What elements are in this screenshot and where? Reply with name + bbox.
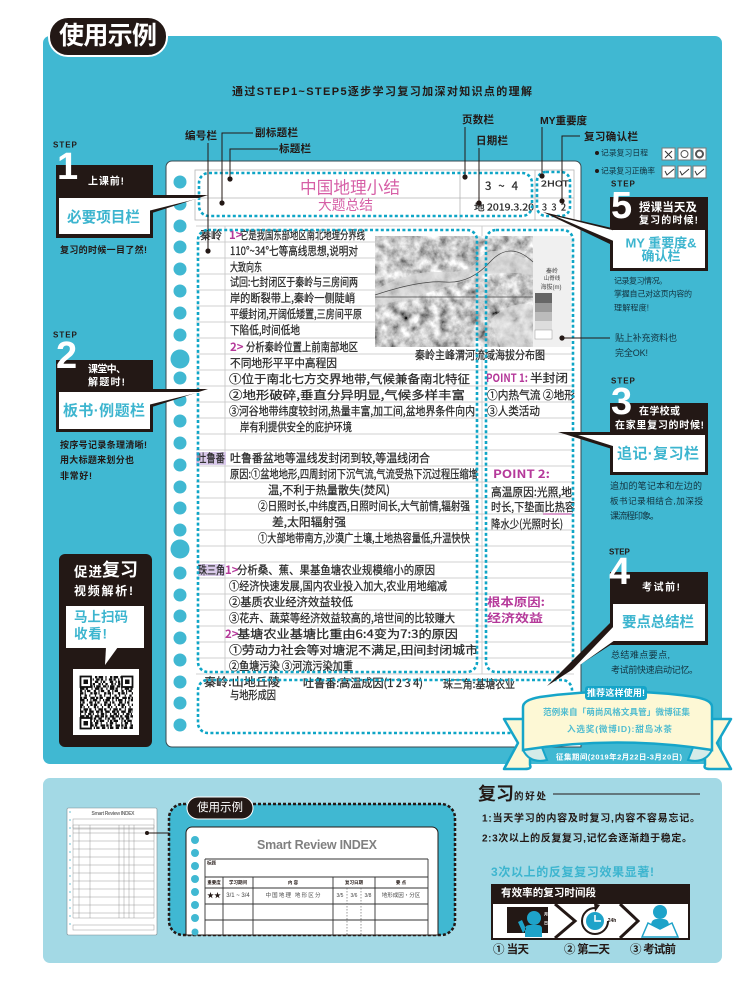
handwritten header [300, 174, 569, 215]
benefits heading: 的好处 [514, 790, 546, 802]
callout: step 5: 复习的时候! [639, 214, 698, 226]
field labels with leader lines: 复习确认栏 [584, 130, 638, 143]
dashed zone: board notes [198, 230, 477, 672]
handwritten notes: main column: ③河谷地带纬度较封闭,热量丰富,加工间,盆地界条件向内 [229, 403, 475, 419]
handwritten notes: main column: ②日照时长,中纬度西,日照时间长,大气前情,辐射强 [258, 498, 470, 514]
pasted map photo: 山脊线 [544, 274, 561, 282]
small title pill [187, 797, 253, 819]
legend: check boxes: 记录复习正确率 [601, 166, 655, 176]
index table: 3/5 [337, 893, 344, 899]
pasted map photo: 秦岭 [546, 267, 558, 275]
speech bubble: 马上扫码 [74, 610, 128, 624]
callout: step 2: 解题时! [88, 376, 125, 388]
handwritten notes: review column: POINT 1: [486, 370, 528, 386]
handwritten notes: main column: ①劳动力社会等对塘泥不满足,田间封闭城市 [229, 642, 478, 658]
callout: step 1 [53, 140, 208, 255]
handwritten notes: review column: POINT 2: [493, 466, 550, 482]
handwritten notes: main column: 分析秦岭位置上前南部地区 [246, 339, 358, 355]
handwritten notes: main column: ②地形破碎,垂直分异明显,气候多样丰富 [229, 387, 465, 403]
field labels with leader lines: 副标题栏 [255, 126, 298, 139]
small index sheet [67, 808, 157, 935]
callout: step 4: STEP [609, 548, 631, 556]
dashed zone: importance and confirm [537, 172, 570, 216]
speech bubble: 收看! [74, 626, 107, 642]
index table: 3/1 ~ 3/4 [226, 893, 250, 899]
handwritten notes: review column [486, 370, 575, 626]
handwritten notes: main column: 秦岭 [200, 227, 222, 243]
benefits list: 1:当天学习的内容及时复习,内容不容易忘记。 [482, 812, 700, 824]
icon: blackboard teacher [507, 907, 548, 937]
handwritten notes: main column: 试回:七封闭区于秦岭与三房间两 [230, 274, 358, 290]
step labels: ③ 考试前 [630, 942, 676, 956]
callout: step 2 [53, 330, 208, 481]
callout: step 3: 课流程印象。 [610, 510, 659, 521]
ribbon: recommended [504, 686, 731, 769]
callout: step 4 [547, 548, 708, 686]
index table: 3/6 [351, 893, 358, 899]
binder holes [170, 176, 190, 732]
index table: 中国地理 地形区分 [266, 891, 321, 899]
callout: step 3: 追加的笔记本和左边的 [610, 480, 702, 491]
callout: step 3: STEP [611, 376, 636, 386]
step labels: ① 当天 [493, 942, 530, 956]
ruled lines [196, 226, 574, 674]
callout: step 5: 确认栏 [642, 248, 680, 264]
handwritten notes: review column: ③人类活动 [487, 403, 540, 419]
speech bubble [66, 606, 144, 665]
callout: step 5: STEP [611, 180, 636, 188]
handwritten notes: main column: ①大部地带南方,沙漠广土壤,土地热容量低,升温快快 [258, 530, 470, 546]
panel: smart review index [43, 778, 722, 963]
index table: 要 点 [396, 879, 407, 886]
legend: check boxes [595, 148, 706, 178]
handwritten notes: main column: 大致向东 [230, 259, 262, 275]
index table: 内 容 [288, 879, 299, 886]
timeline strip [491, 884, 690, 956]
handwritten notes: review column: 半封闭 [530, 370, 568, 386]
zoomed example: Smart Review INDEX [257, 838, 378, 852]
handwritten notes: main column: 不同地形平平中高程因 [230, 355, 337, 371]
callout: step 1: 1 [57, 146, 78, 188]
handwritten notes: review column: 根本原因: [487, 594, 545, 610]
handwritten notes: summary: 与地形成因 [230, 687, 276, 703]
ribbon: recommended: 征集期间(2019年2月22日-3月20日) [556, 752, 682, 762]
callout: step 2: 非常好! [60, 470, 92, 481]
handwritten notes: review column: 时长,下垫面比热容 [491, 499, 575, 515]
video QR panel: 促进 [74, 564, 102, 580]
callout: step 3: 板书记录相结合,加深授 [610, 495, 703, 506]
handwritten header: 地 2019.3.20 [474, 200, 534, 214]
note: paste extra material: 贴上补充资料也 [615, 332, 677, 343]
dashed zone: review notes [486, 230, 573, 672]
callout: step 3: 在学校或 [639, 404, 680, 418]
handwritten notes: summary: 珠三角:基塘农业 [443, 676, 515, 692]
handwritten notes: review column: 降水少(光照时长) [491, 516, 563, 532]
callout: step 5: 授课当天及 [639, 200, 698, 214]
callout: step 4: 总结难点要点, [611, 649, 670, 660]
handwritten header: 中国地理小结 [300, 174, 400, 198]
leader line [145, 831, 178, 835]
handwritten notes: summary [204, 674, 515, 703]
subtitle: 通过STEP1~STEP5逐步学习复习加深对知识点的理解 [232, 84, 532, 98]
callout: step 5: 掌握自己对这页内容的 [614, 288, 692, 298]
handwritten notes: summary: 吐鲁番:高温成因(1 2 3 4) [303, 675, 423, 691]
callout: step 3: 3 [611, 381, 632, 423]
handwritten notes: main column: 原因:①盆地地形,四周封闭下沉气流,气流受热下沉过程压缩增 [230, 466, 478, 482]
handwritten notes: main column: 分析桑、蕉、果基鱼塘农业规模缩小的原因 [237, 562, 435, 578]
handwritten notes: main column: 1> [225, 562, 239, 578]
handwritten notes: main column: 下陷低,时间低地 [230, 322, 300, 338]
handwritten notes: main column: 吐鲁番盆地等温线发封闭到较,等温线闭合 [230, 450, 430, 466]
callout: step 4: 考试前! [642, 580, 680, 594]
benefits list [482, 812, 700, 844]
index table: 地形成因・分区 [382, 891, 421, 899]
handwritten notes: main column: 温,不利于热量散失(焚风) [268, 482, 390, 498]
index table: 标题 [207, 860, 216, 866]
handwritten notes: main column: 110°~34°七等高线思想,说明对 [230, 243, 358, 259]
handwritten notes: main column: 秦岭主峰渭河流域海拔分布图 [415, 347, 545, 363]
index table: 学习期间 [229, 879, 247, 886]
handwritten notes: main column: ②鱼塘污染 ③河流污染加重 [229, 658, 353, 674]
note: paste extra material: 完全OK! [615, 347, 648, 358]
benefits list: 2:3次以上的反复复习,记忆会逐渐趋于稳定。 [482, 832, 692, 844]
index table: ★★ [207, 892, 221, 900]
icon: student reading [642, 905, 678, 937]
callout: step 5: 记录复习情况。 [614, 276, 667, 286]
handwritten header: 大题总结 [318, 195, 373, 215]
handwritten notes: review column: 经济效益 [487, 610, 544, 626]
callout: step 1: 复习的时候一目了然! [60, 244, 147, 255]
handwritten notes: main column: ①位于南北七方交界地带,气候兼备南北特征 [229, 371, 471, 387]
field labels with leader lines [185, 113, 638, 254]
video QR panel: 视频解析! [74, 583, 133, 598]
handwritten header: 3 3 2 [542, 200, 566, 214]
notebook page [166, 161, 581, 747]
handwritten notes: main column [196, 227, 545, 674]
callout: step 2: 板书·例题栏 [63, 402, 145, 420]
handwritten notes: review column: 高温原因:光照,地 [491, 484, 572, 500]
benefits heading: 复习 [478, 784, 514, 804]
callout: step 2: STEP [53, 330, 78, 340]
benefits heading [478, 784, 700, 804]
ribbon: recommended: 范例来自「萌尚风格文具管」微博征集 [543, 706, 690, 717]
icon: blackboard teacher: 月 [544, 912, 548, 916]
ribbon: recommended: 推荐这样使用! [587, 687, 645, 698]
index table: 重要度 [207, 879, 221, 886]
handwritten notes: main column: 吐鲁番 [197, 450, 225, 466]
handwritten header: 2HOT [541, 178, 569, 190]
handwritten notes: main column: ②基质农业经济效益较低 [229, 594, 353, 610]
handwritten notes: main column: 珠三角 [198, 562, 225, 578]
step labels: ② 第二天 [564, 942, 610, 956]
dashed zone: summary [198, 680, 572, 733]
note: paste extra material [559, 332, 677, 358]
icon: blackboard teacher: 日 [544, 920, 548, 926]
small title pill: 使用示例 [197, 800, 243, 814]
callout: step 4: 考试前快速启动记忆。 [611, 664, 698, 675]
callout: step 1: 上课前! [88, 174, 124, 188]
small index sheet: Smart Review INDEX [92, 811, 135, 817]
header form grid [195, 170, 574, 220]
dashed zone: required items [199, 173, 532, 216]
icon: 24h clock: 24h [608, 918, 616, 924]
field labels with leader lines: 页数栏 [462, 113, 494, 126]
timeline strip: 有效率的复习时间段 [501, 886, 596, 899]
callout: step 2: 按序号记录条理清晰! [60, 439, 147, 450]
field labels with leader lines: 日期栏 [476, 134, 508, 147]
handwritten notes: main column: 岸的断裂带上,秦岭一侧陡峭 [230, 290, 355, 306]
video QR panel: 复习 [102, 560, 138, 580]
handwritten notes: main column: ①经济快速发展,国内农业投入加大,农业用地缩减 [229, 578, 447, 594]
zoomed example [169, 797, 455, 936]
handwritten notes: summary: 秦岭:山地丘陵 [204, 674, 281, 690]
callout: step 1: STEP [53, 140, 78, 150]
step labels [493, 942, 676, 956]
callout: step 5: MY 重要度& [626, 236, 696, 250]
callout: step 2: 课堂中、 [88, 362, 126, 376]
video QR panel [59, 554, 152, 747]
index table [205, 859, 428, 935]
handwritten notes: review column: ①内热气流 ②地形 [487, 387, 575, 403]
handwritten notes: main column: 基塘农业基塘比重由6:4变为7:3的原因 [237, 626, 458, 642]
ribbon: recommended: 入选奖(微博ID):甜岛冰茶 [567, 723, 672, 734]
pasted map photo: 海拔(m) [540, 283, 562, 291]
highlight heading: 3次以上的反复复习效果显著! [491, 864, 654, 879]
handwritten notes: main column: 平缓封闭,开阔低矮置,三房间平原 [230, 306, 362, 322]
callout: step 4: 4 [609, 551, 630, 593]
handwritten notes: main column: 它是我国东部地区南北地理分界线 [240, 227, 365, 243]
QR code [73, 669, 139, 735]
callout: step 3: 追记·复习栏 [617, 444, 699, 462]
index table: 复习日期 [345, 879, 363, 886]
handwritten notes: main column: 1> [229, 227, 243, 243]
chevrons [555, 904, 638, 938]
field labels with leader lines: 标题栏 [279, 142, 312, 155]
callout: step 5 [543, 180, 708, 312]
handwritten notes: main column: 岸有利提供安全的庇护环境 [240, 419, 352, 435]
field labels with leader lines: MY重要度 [540, 114, 588, 127]
legend: check boxes: 记录复习日程 [601, 148, 648, 158]
callout: step 2: 用大标题来划分也 [60, 454, 134, 465]
title pill: 使用示例: 使用示例 [59, 22, 157, 50]
handwritten notes: main column: ③花卉、蔬菜等经济效益较高的,培世间的比较赚大 [229, 610, 455, 626]
panel: main usage example [43, 17, 731, 769]
callout: step 5: 5 [611, 185, 632, 227]
pasted map photo [375, 236, 571, 347]
callout: step 3: 在家里复习的时候! [615, 418, 704, 432]
callout: step 2: 2 [56, 335, 77, 377]
handwritten notes: main column: 差,太阳辐射强 [272, 514, 347, 530]
title pill: 使用示例 [49, 17, 167, 56]
field labels with leader lines: 编号栏 [185, 129, 218, 142]
callout: step 3 [558, 376, 708, 521]
callout: step 1: 必要项目栏 [67, 208, 140, 226]
handwritten header: 3 ~ 4 [485, 178, 519, 194]
callout: step 5: 理解程度! [614, 302, 649, 312]
handwritten notes: main column: 2> [225, 626, 239, 642]
handwritten notes: main column: 2> [230, 339, 244, 355]
index table: 3/8 [365, 893, 372, 899]
icon: 24h clock [582, 903, 616, 934]
callout: step 4: 要点总结栏 [622, 613, 694, 631]
